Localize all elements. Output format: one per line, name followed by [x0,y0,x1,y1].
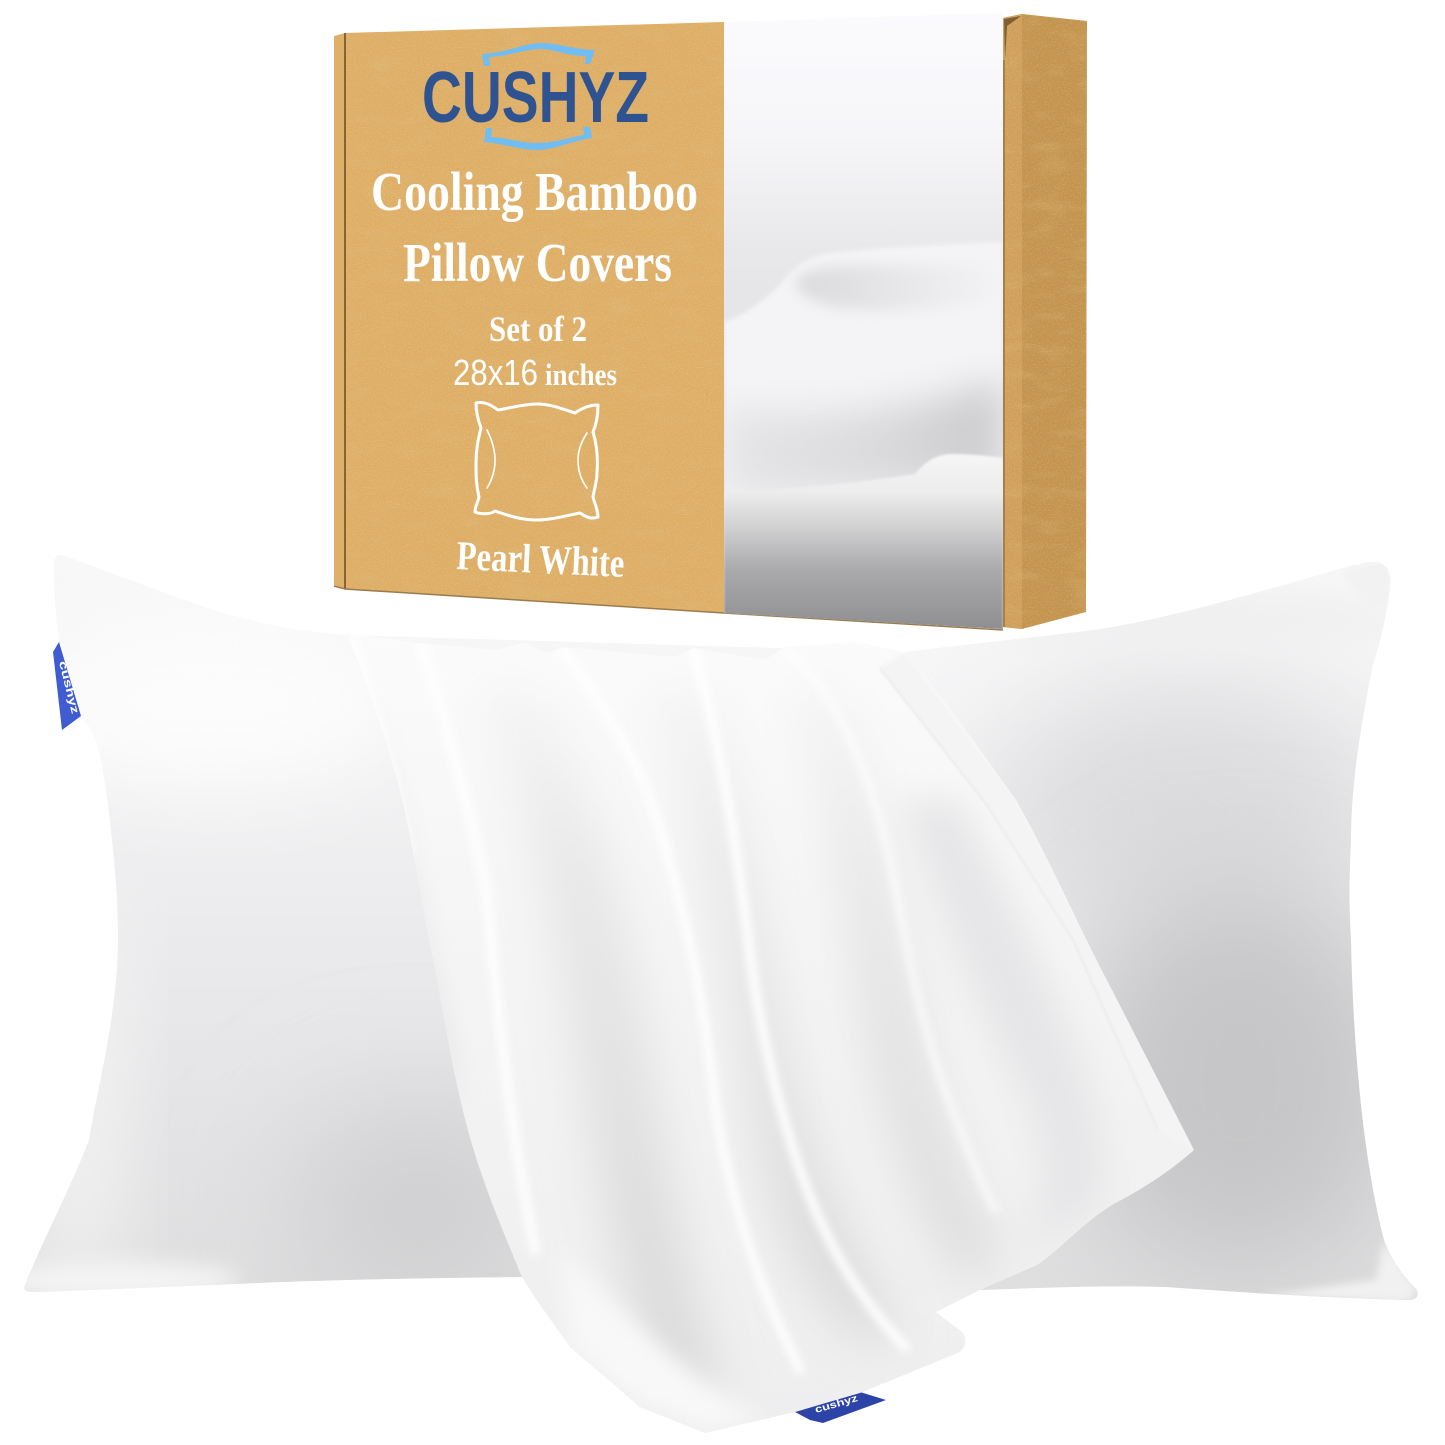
heading line 2: Pillow Covers [403,232,672,293]
logo bottom bracket [484,127,592,150]
size: 28x16 [453,352,538,393]
bottom tag: cushyz [814,1393,859,1416]
drape pillowcase [403,655,1194,1433]
box left flap [334,33,345,589]
pillow tag left: cushyz [56,660,81,716]
bottom tag [795,1392,886,1423]
logo [422,43,649,150]
box right side panel [1000,10,1090,635]
pillow body [0,540,1445,1320]
icon: pillow [475,403,598,520]
box fabric window [724,112,1003,629]
logo top bracket [482,43,595,66]
pillow tag left [53,642,81,730]
set count: Set of 2 [489,309,587,349]
product box [334,10,1090,635]
colour name: Pearl White [456,532,626,586]
pillow [0,540,1445,1320]
fold shadows [375,690,470,1120]
size [453,352,617,393]
box front kraft panel [334,15,1003,630]
logo wordmark: CUSHYZ [422,58,649,138]
hem band [880,668,977,792]
heading: Cooling Bamboo [371,161,698,222]
fold highlights [505,739,994,1371]
drape fabric [403,655,1194,1433]
size: inches [545,357,617,392]
